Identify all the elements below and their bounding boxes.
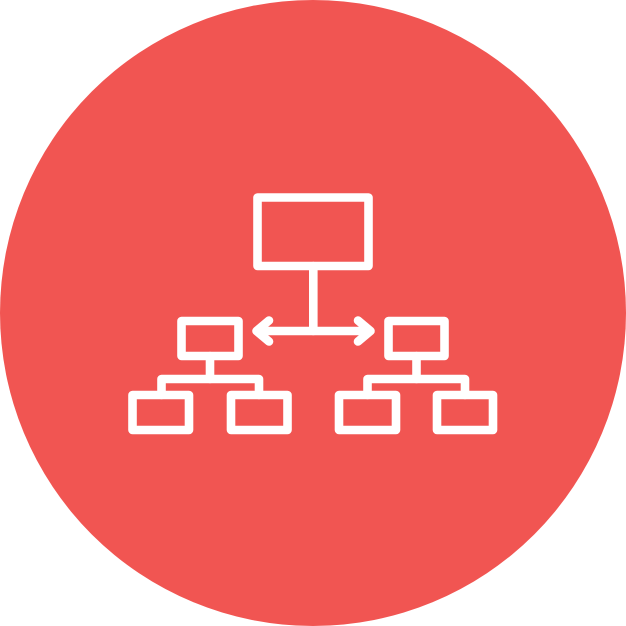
top box [258,198,368,266]
right sub-hierarchy [339,321,493,430]
icon: hierarchy network diagram [132,198,493,430]
stem from top box [309,266,318,331]
double-headed arrow [256,320,370,342]
left sub-hierarchy [132,321,288,430]
